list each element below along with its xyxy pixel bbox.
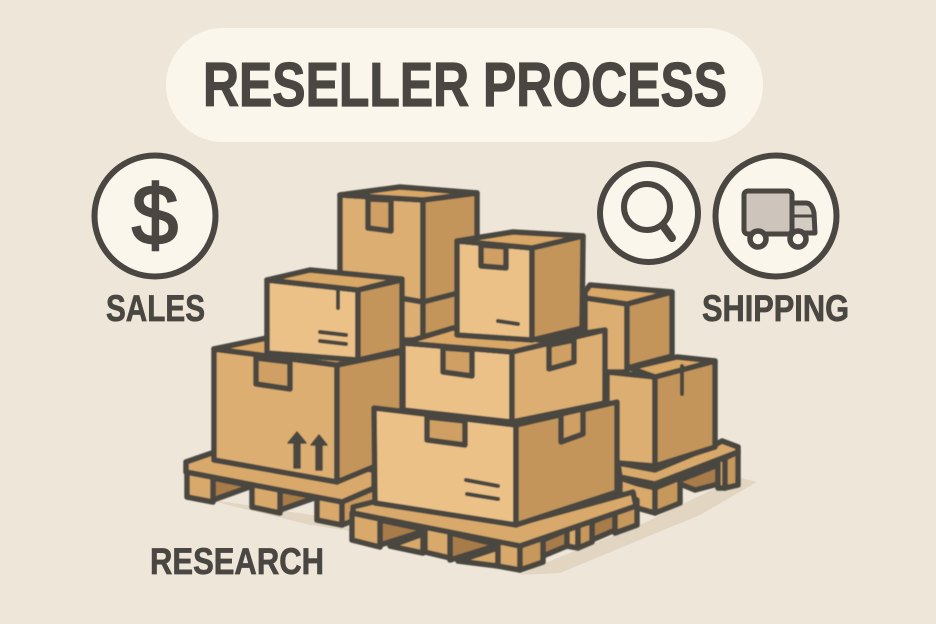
icon: magnifier research [600,164,698,262]
label: sales: SALES [106,288,205,329]
box: front middle [403,328,605,422]
icon: this way up arrows [288,432,327,470]
icon: dollar sales [94,156,216,276]
box: front lower [374,402,617,525]
title pill [166,28,763,142]
illustration: stacked boxes on pallets [186,187,738,570]
icon: dollar sales: $ [132,168,178,262]
box: front top [457,232,583,340]
label: shipping: SHIPPING [702,288,849,329]
pallet: right [618,441,738,513]
ground shadow [200,477,757,575]
pallet: left [186,453,375,525]
box: right back upper [585,285,672,372]
box: left large [214,338,402,482]
icon: truck shipping [716,156,836,276]
pallet: front [352,492,637,570]
box: back tall [340,187,477,340]
box: right lower [607,357,715,466]
title: RESELLER PROCESS [203,51,727,120]
label: research: RESEARCH [150,541,324,582]
box: left small [267,270,402,360]
